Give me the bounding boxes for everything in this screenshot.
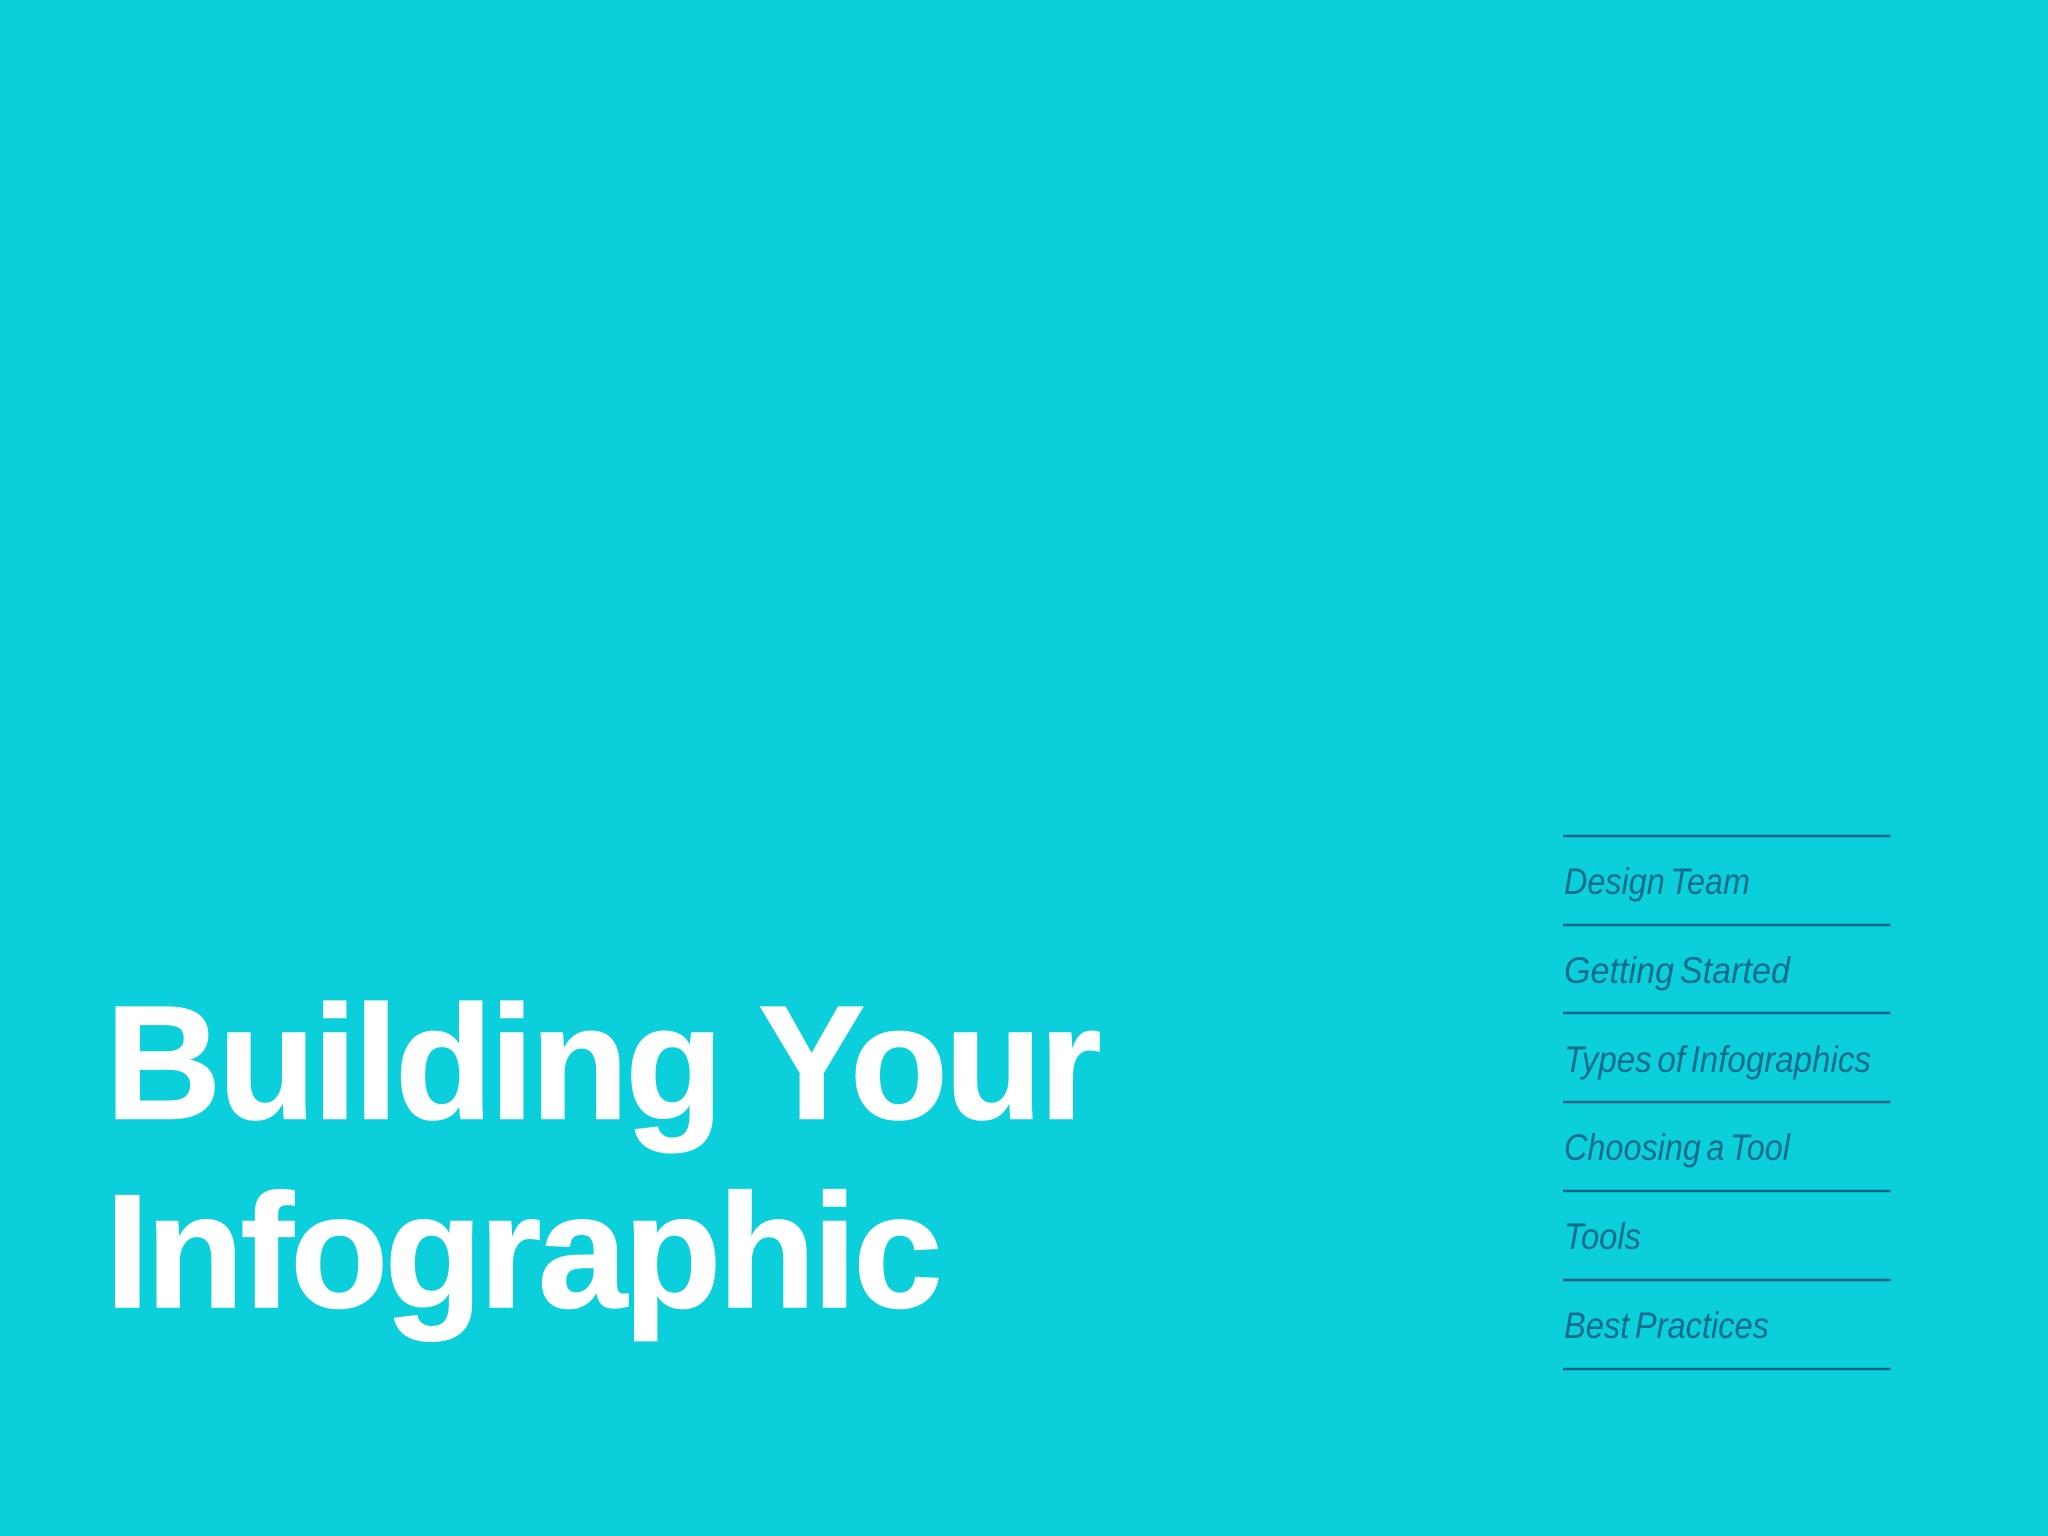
menu item: Getting Started: Getting Started bbox=[1564, 950, 1791, 991]
title bbox=[105, 973, 1100, 1342]
title line 1: Building Your bbox=[106, 973, 1100, 1154]
menu item: Design Team: Design Team bbox=[1564, 861, 1750, 902]
menu item: Choosing a Tool: Choosing a Tool bbox=[1564, 1127, 1792, 1168]
menu item: Types of Infographics: Types of Infographics bbox=[1564, 1039, 1871, 1080]
panel: contents menu bbox=[1563, 836, 1890, 1369]
title line 2: Infographic bbox=[105, 1161, 939, 1342]
menu item: Tools: Tools bbox=[1564, 1216, 1641, 1257]
menu item: Best Practices: Best Practices bbox=[1564, 1305, 1769, 1346]
